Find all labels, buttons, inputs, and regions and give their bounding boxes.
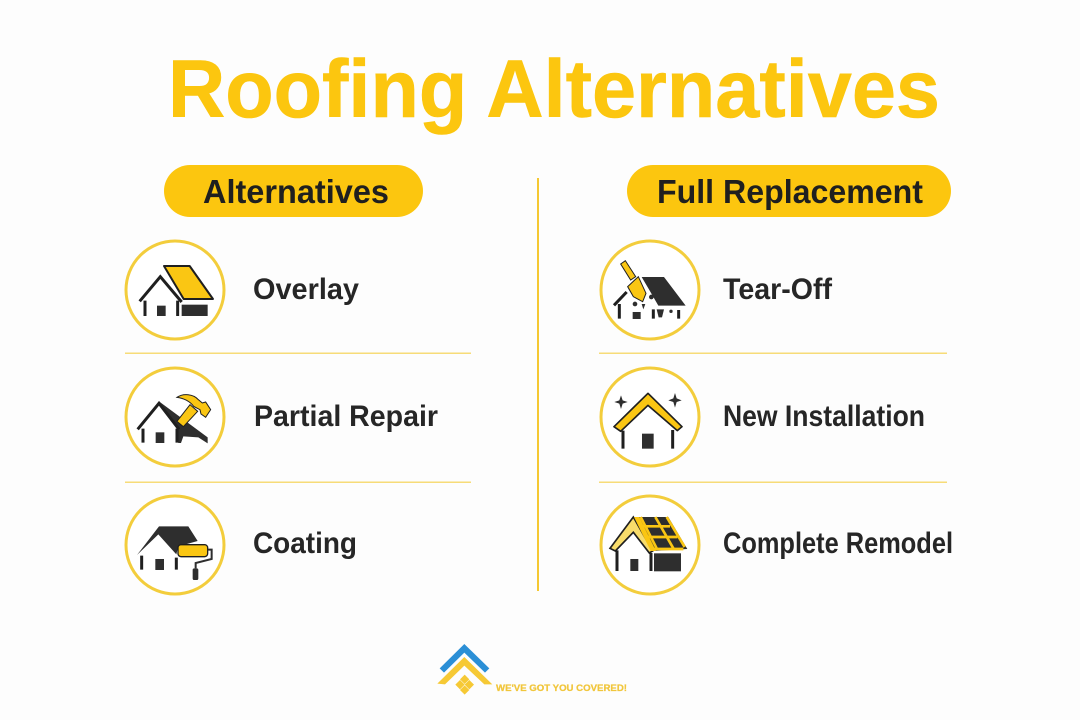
heading: full replacement bbox=[627, 165, 951, 217]
item: tear-off bbox=[601, 241, 833, 339]
item: complete remodel: Complete Remodel bbox=[723, 527, 953, 560]
footer logo bbox=[437, 644, 627, 695]
panel: full replacement bbox=[599, 165, 953, 594]
title: Roofing Alternatives bbox=[168, 44, 940, 135]
row divider bbox=[599, 352, 947, 354]
icon: sparkle left bbox=[614, 395, 628, 409]
icon: new roof with sparkles bbox=[614, 393, 682, 449]
item: complete remodel bbox=[601, 496, 953, 594]
item: new installation bbox=[601, 368, 925, 466]
item: coating bbox=[126, 496, 357, 594]
item: overlay: Overlay bbox=[253, 273, 359, 306]
icon: sparkle right bbox=[668, 393, 682, 408]
icon: trowel on roof bbox=[614, 261, 686, 319]
item: partial repair: Partial Repair bbox=[254, 400, 438, 433]
center divider bbox=[537, 178, 539, 591]
row divider bbox=[125, 482, 471, 483]
panel: alternatives bbox=[125, 165, 471, 594]
heading: full replacement: Full Replacement bbox=[657, 173, 923, 210]
row divider bbox=[599, 482, 947, 483]
row divider bbox=[125, 352, 471, 354]
icon: logo mark bbox=[437, 644, 492, 695]
icon: paint roller bbox=[137, 526, 212, 580]
item: new installation: New Installation bbox=[723, 400, 925, 433]
heading: alternatives: Alternatives bbox=[203, 173, 389, 210]
icon: overlay roof bbox=[140, 266, 213, 316]
item: partial repair bbox=[126, 368, 438, 466]
item: tear-off: Tear-Off bbox=[723, 273, 833, 306]
icon: roof grid remodel bbox=[610, 517, 687, 571]
icon: hammer on roof bbox=[138, 395, 211, 443]
tagline: WE'VE GOT YOU COVERED! bbox=[496, 683, 627, 693]
heading: alternatives bbox=[164, 165, 423, 217]
item: coating: Coating bbox=[253, 527, 357, 560]
item: overlay bbox=[126, 241, 359, 339]
